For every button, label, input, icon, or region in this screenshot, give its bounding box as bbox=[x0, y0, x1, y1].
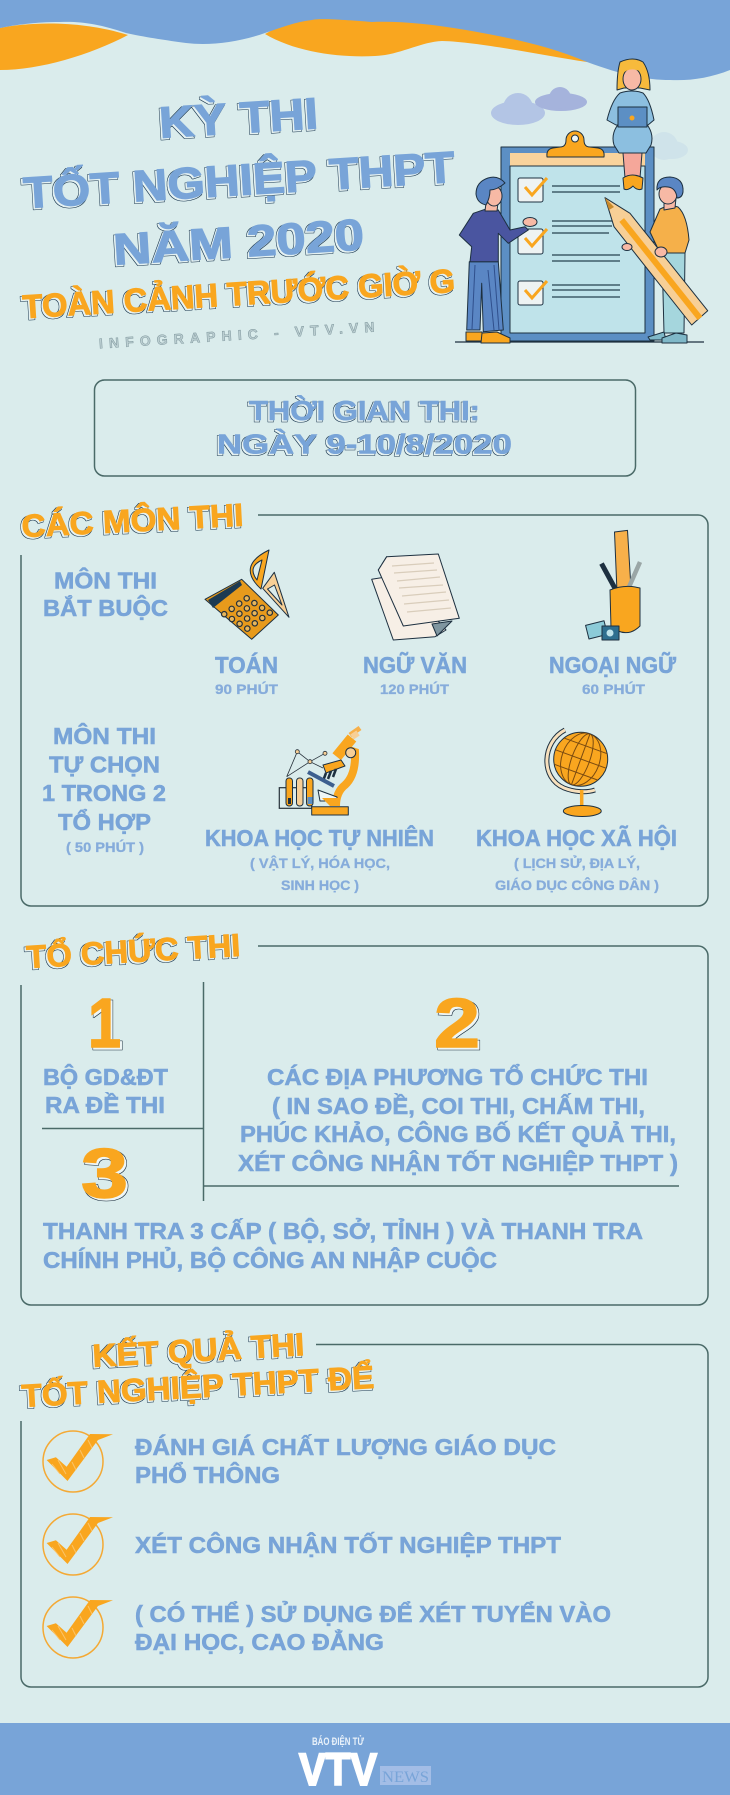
panel: exam results bbox=[21, 1326, 708, 1687]
elective subjects label: MÔN THI bbox=[53, 722, 156, 749]
icon: sheets of paper bbox=[372, 554, 459, 640]
step 2 text: CÁC ĐỊA PHƯƠNG TỔ CHỨC THI bbox=[267, 1063, 648, 1090]
result 1 text: ĐÁNH GIÁ CHẤT LƯỢNG GIÁO DỤC bbox=[135, 1433, 556, 1460]
numbers 1, 2, 3: 2 bbox=[434, 984, 480, 1062]
result 3 text bbox=[135, 1599, 611, 1655]
panel: organisation bbox=[21, 927, 708, 1305]
step 3 text: THANH TRA 3 CẤP ( BỘ, SỞ, TỈNH ) VÀ THANH TRA bbox=[43, 1216, 643, 1244]
step 2 text: ( IN SAO ĐỀ, COI THI, CHẤM THI, bbox=[272, 1092, 645, 1119]
step 2 text: XÉT CÔNG NHẬN TỐT NGHIỆP THPT ) bbox=[238, 1149, 678, 1176]
subject labels: NGOẠI NGỮ bbox=[549, 651, 677, 678]
compulsory subjects label: BẮT BUỘC bbox=[43, 594, 168, 621]
elective subject labels: ( LỊCH SỬ, ĐỊA LÝ, bbox=[514, 854, 640, 871]
elective subjects label: 1 TRONG 2 bbox=[42, 780, 166, 806]
subject labels: 120 PHÚT bbox=[380, 680, 449, 697]
logo: VTV: VTV bbox=[299, 1744, 377, 1795]
panel: exam time bbox=[94, 380, 636, 476]
icon: microscope bbox=[279, 728, 360, 815]
elective subject labels bbox=[205, 824, 677, 893]
elective subjects label bbox=[42, 722, 166, 855]
heading: exam results: KẾT QUẢ THI bbox=[92, 1326, 305, 1374]
result 3 text: ĐẠI HỌC, CAO ĐẲNG bbox=[135, 1628, 384, 1655]
footer band bbox=[0, 1723, 730, 1795]
illustration: clouds bbox=[491, 87, 688, 160]
subject labels: TOÁN bbox=[215, 651, 278, 678]
result 1 text: PHỔ THÔNG bbox=[135, 1461, 280, 1488]
heading: exam results: TỐT NGHIỆP THPT ĐỂ bbox=[21, 1359, 375, 1414]
title bbox=[22, 88, 456, 275]
exam time text: THỜI GIAN THI: bbox=[249, 395, 480, 426]
subject labels bbox=[215, 651, 677, 697]
illustration: boy holding pencil bbox=[605, 177, 708, 343]
result 1 text bbox=[135, 1433, 556, 1488]
elective subjects label: ( 50 PHÚT ) bbox=[66, 838, 144, 855]
illustration: clipboard bbox=[455, 131, 704, 342]
subject labels: 90 PHÚT bbox=[215, 680, 278, 697]
subject labels: 60 PHÚT bbox=[582, 680, 645, 697]
elective subject labels: ( VẬT LÝ, HÓA HỌC, bbox=[250, 854, 390, 871]
logo: NEWS badge: NEWS bbox=[382, 1769, 429, 1786]
exam time text bbox=[217, 395, 512, 460]
elective subjects label: TỰ CHỌN bbox=[49, 752, 160, 778]
result 3 text: ( CÓ THỂ ) SỬ DỤNG ĐỂ XÉT TUYỂN VÀO bbox=[135, 1599, 611, 1627]
icon: pen cup bbox=[586, 530, 640, 640]
step 3 text bbox=[43, 1216, 643, 1273]
numbers 1, 2, 3 bbox=[81, 984, 480, 1212]
result 2 text: XÉT CÔNG NHẬN TỐT NGHIỆP THPT bbox=[135, 1531, 561, 1558]
compulsory subjects label: MÔN THI bbox=[54, 567, 157, 594]
subtitle: TOÀN CẢNH TRƯỚC GIỜ G bbox=[22, 262, 456, 325]
subject labels: NGỮ VĂN bbox=[363, 651, 467, 678]
footer caption: BÁO ĐIỆN TỬ bbox=[312, 1735, 365, 1748]
elective subject labels: GIÁO DỤC CÔNG DÂN ) bbox=[495, 876, 659, 893]
elective subjects label: TỔ HỢP bbox=[58, 808, 151, 835]
elective subject labels: SINH HỌC ) bbox=[281, 877, 359, 893]
numbers 1, 2, 3: 3 bbox=[81, 1134, 128, 1212]
step 1 text: BỘ GD&ĐT bbox=[43, 1063, 168, 1090]
illustration: man pointing bbox=[459, 177, 537, 343]
numbers 1, 2, 3: 1 bbox=[88, 984, 121, 1062]
heading: organisation: TỔ CHỨC THI bbox=[26, 927, 241, 975]
elective subject labels: KHOA HỌC XÃ HỘI bbox=[476, 824, 677, 851]
title: TỐT NGHIỆP THPT bbox=[22, 141, 456, 218]
title: NĂM 2020 bbox=[112, 209, 365, 275]
step 2 text bbox=[238, 1063, 678, 1176]
elective subject labels: KHOA HỌC TỰ NHIÊN bbox=[205, 824, 434, 851]
exam time text: NGÀY 9-10/8/2020 bbox=[217, 428, 512, 460]
icon: check 3 bbox=[43, 1597, 113, 1658]
step 2 text: PHÚC KHẢO, CÔNG BỐ KẾT QUẢ THI, bbox=[240, 1119, 676, 1147]
icon: check 1 bbox=[43, 1431, 113, 1492]
step 1 text: RA ĐỀ THI bbox=[45, 1091, 165, 1118]
icon: calculator with protractor and set square bbox=[205, 550, 289, 639]
illustration: woman with laptop bbox=[607, 59, 654, 190]
step 1 text bbox=[43, 1063, 168, 1118]
icon: check 2 bbox=[43, 1514, 113, 1575]
credit line: INFOGRAPHIC - VTV.VN bbox=[98, 319, 375, 351]
step 3 text: CHÍNH PHỦ, BỘ CÔNG AN NHẬP CUỘC bbox=[43, 1245, 497, 1273]
title: KỲ THI bbox=[158, 88, 319, 148]
compulsory subjects label bbox=[43, 567, 168, 621]
heading: subjects: CÁC MÔN THI bbox=[21, 497, 244, 544]
header waves bbox=[0, 0, 730, 80]
icon: globe bbox=[544, 728, 608, 817]
panel: subjects bbox=[21, 497, 708, 906]
heading: exam results bbox=[21, 1326, 375, 1414]
